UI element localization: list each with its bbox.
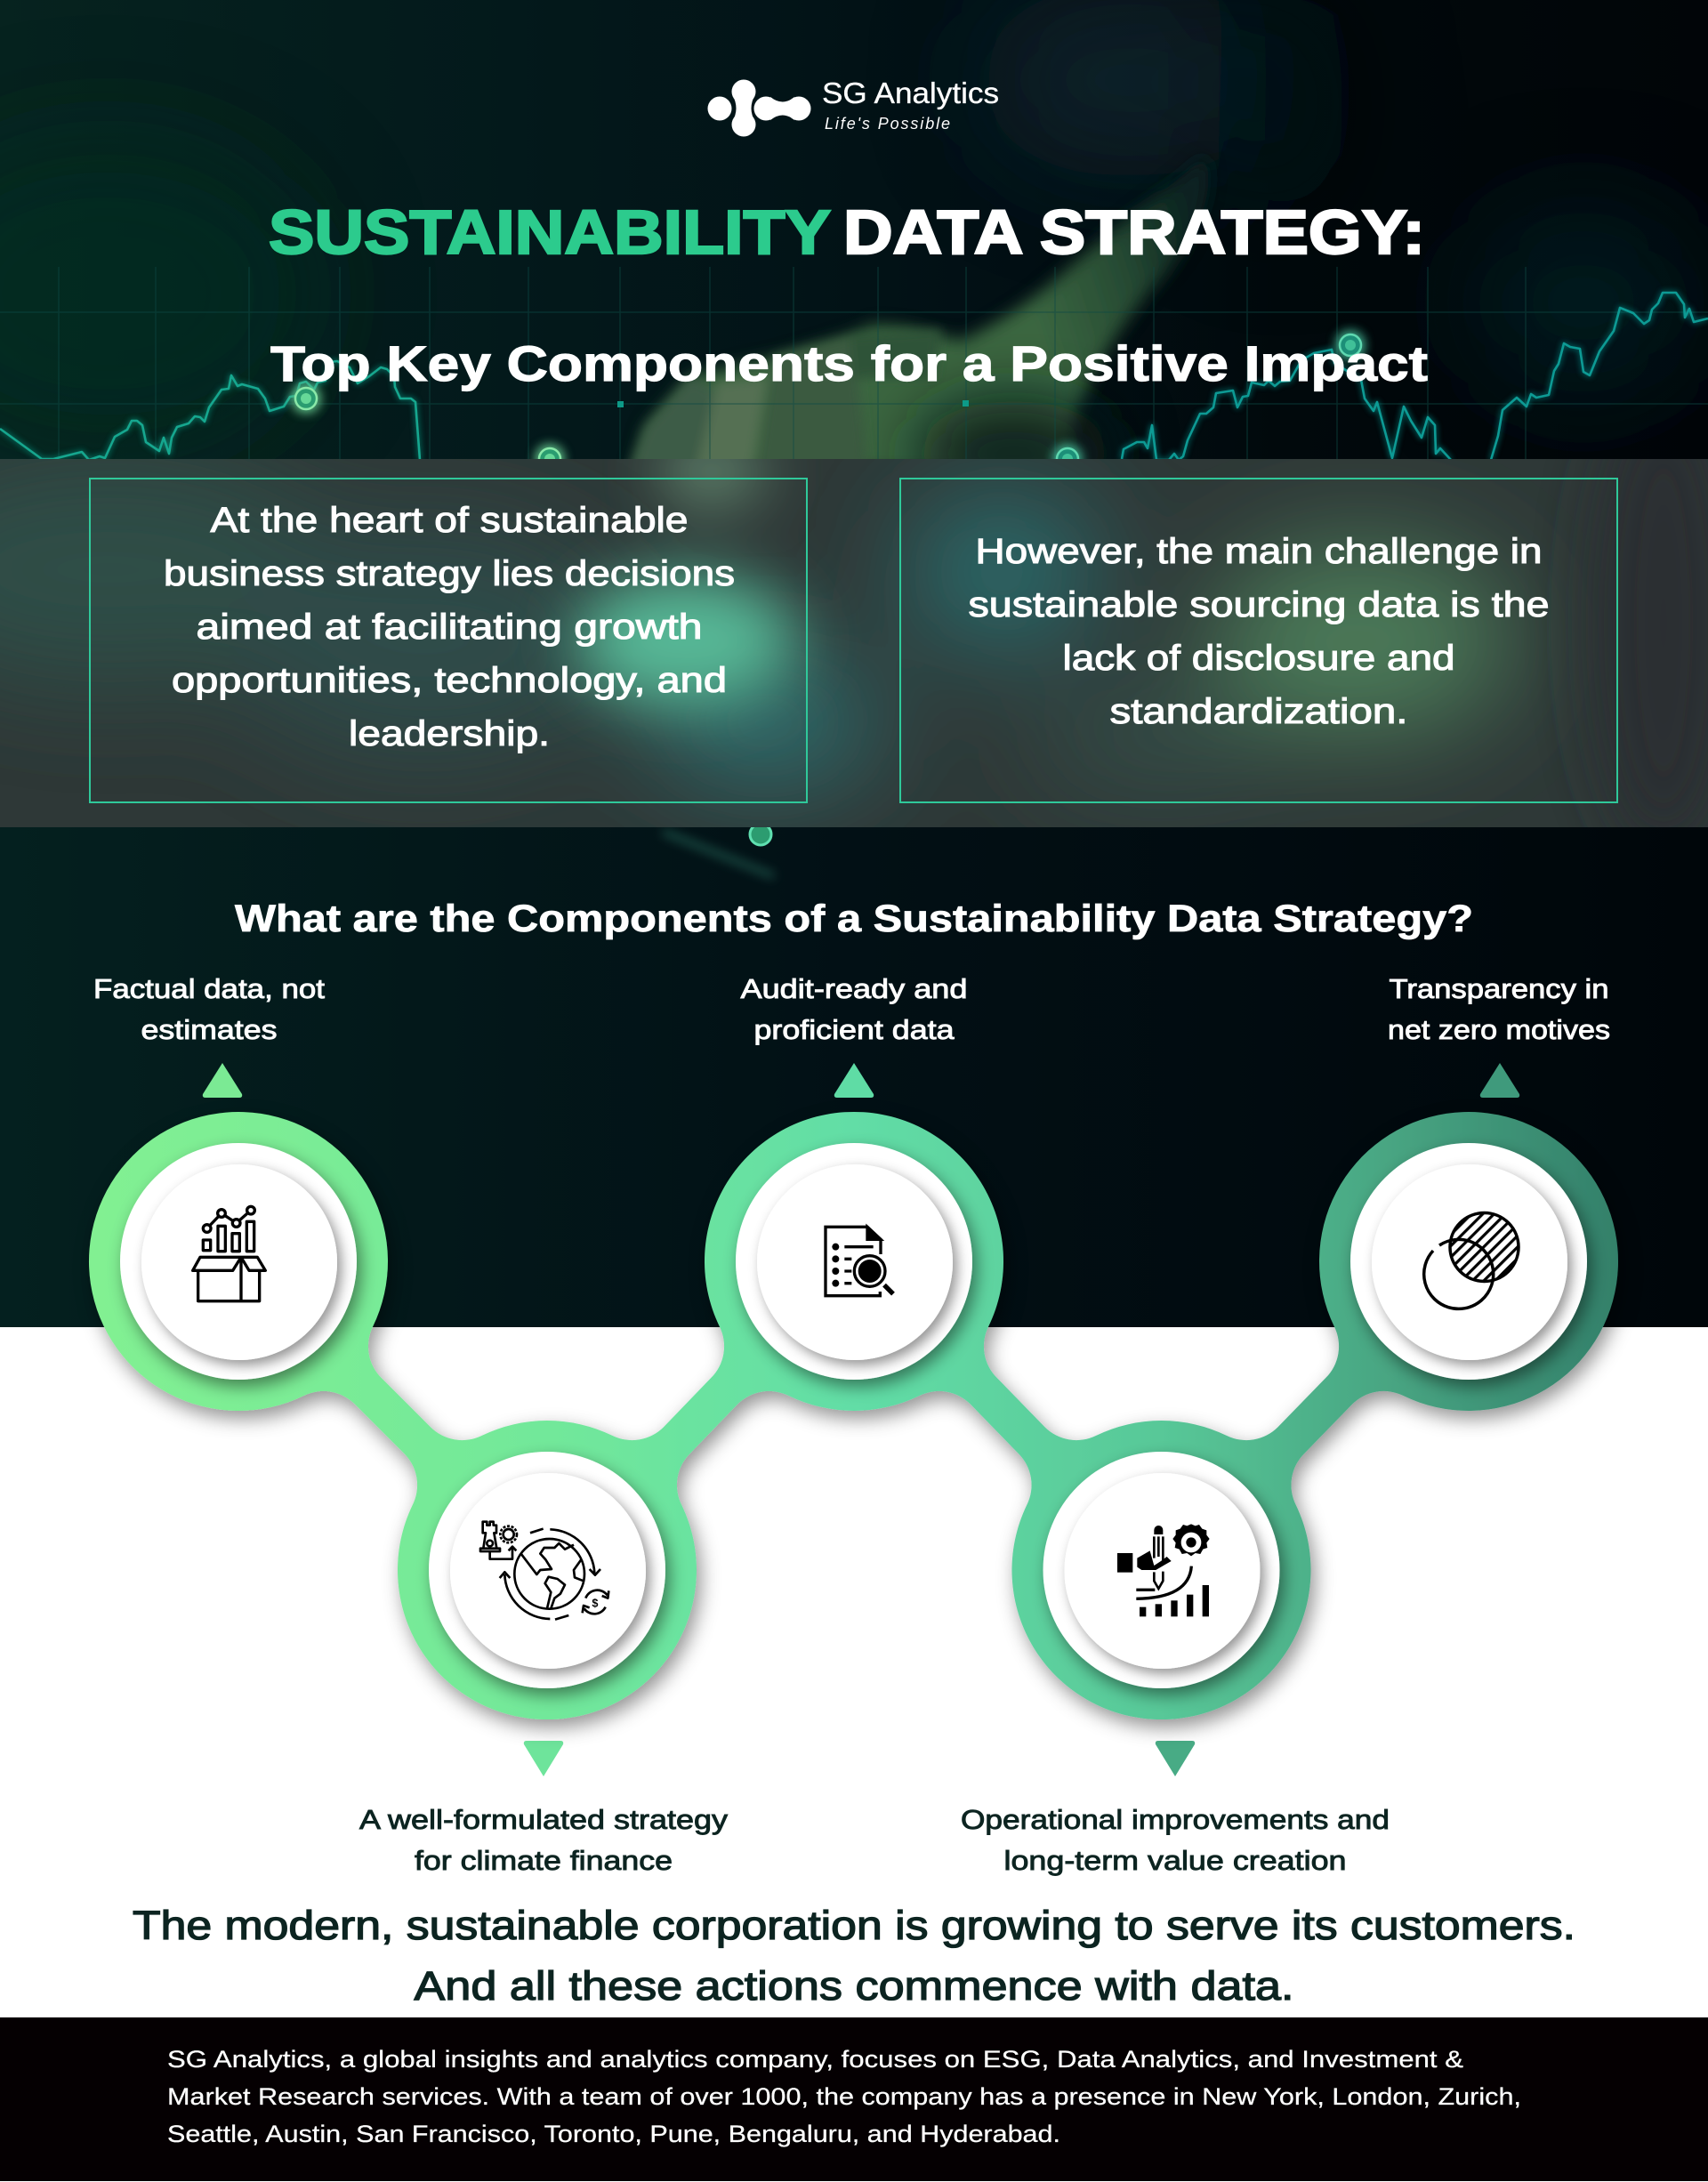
hand and arm	[625, 165, 1211, 459]
label: operational improvements: long-term value creation	[1003, 1845, 1347, 1876]
chart node	[1057, 448, 1078, 470]
text box: left intro: business strategy lies decisions	[164, 554, 735, 593]
arrow: down 1	[524, 1741, 563, 1776]
text box: right challenge: lack of disclosure and	[1062, 639, 1455, 678]
label: transparency	[1388, 973, 1610, 1045]
title: SUSTAINABILITY	[269, 197, 831, 267]
icon: overlapping circles	[1424, 1213, 1519, 1308]
node 1 discs	[120, 1143, 357, 1380]
closing statement	[133, 1903, 1575, 2009]
text box: right challenge: sustainable sourcing data is the	[968, 585, 1550, 624]
text box: left intro: leadership.	[349, 714, 550, 753]
arrow: up 1	[203, 1063, 242, 1098]
footer: Seattle, Austin, San Francisco, Toronto, Pune, Bengaluru, and Hyderabad.	[167, 2121, 1060, 2147]
section heading: What are the Components of a Sustainability Data Strategy?	[235, 898, 1473, 940]
chart node	[539, 448, 560, 470]
arrow: up 3	[1480, 1063, 1519, 1098]
footer: Market Research services. With a team of over 1000, the company has a presence in New York, London, Zurich,	[167, 2083, 1521, 2110]
title: DATA STRATEGY:	[843, 197, 1425, 267]
chart markers	[617, 400, 969, 407]
connected circles path	[89, 1112, 1618, 1719]
chart nodes	[295, 388, 317, 409]
label: climate finance: for climate finance	[415, 1845, 673, 1876]
title	[269, 197, 1425, 267]
text box: right challenge: standardization.	[1110, 692, 1407, 731]
label: audit-ready	[740, 973, 968, 1045]
arrow: up 2	[834, 1063, 874, 1098]
logo	[708, 76, 999, 137]
closing statement: And all these actions commence with data.	[415, 1963, 1293, 2009]
text box: left intro: At the heart of sustainable	[210, 501, 689, 540]
panel: frosted band	[0, 459, 1708, 827]
icon: globe finance	[480, 1522, 608, 1620]
chart node	[1340, 334, 1361, 356]
node 3 discs	[736, 1143, 972, 1380]
device glint	[663, 824, 774, 876]
label: climate finance	[359, 1804, 729, 1876]
label: factual data: estimates	[141, 1014, 278, 1045]
text box: left intro	[90, 479, 807, 802]
text box: left intro: opportunities, technology, and	[172, 661, 727, 700]
node 4 discs	[1043, 1452, 1279, 1688]
dark header background	[0, 0, 1708, 1327]
text box: right challenge: However, the main challenge in	[975, 532, 1543, 571]
footer: SG Analytics, a global insights and analytics company, focuses on ESG, Data Analytics, and Investment &	[167, 2046, 1463, 2073]
icon: audit document	[826, 1227, 893, 1296]
label: audit-ready: Audit-ready and	[740, 973, 968, 1004]
icon: data box	[193, 1206, 265, 1301]
node 5 discs	[1350, 1143, 1587, 1380]
logo: Life's Possible	[825, 115, 950, 133]
label: factual data: Factual data, not	[93, 973, 325, 1004]
footer	[0, 2017, 1708, 2181]
label: transparency: Transparency in	[1390, 973, 1608, 1004]
logo mark	[708, 80, 811, 137]
logo: SG Analytics	[822, 76, 999, 109]
closing statement: The modern, sustainable corporation is growing to serve its customers.	[133, 1903, 1575, 1948]
arrow: down 2	[1156, 1741, 1195, 1776]
glowing chart line	[0, 293, 1708, 470]
node 2 discs	[429, 1452, 665, 1688]
icon: operations	[1117, 1524, 1210, 1616]
chart grid lines	[0, 267, 1708, 459]
subtitle: Top Key Components for a Positive Impact	[270, 335, 1428, 391]
label: audit-ready: proficient data	[754, 1014, 955, 1045]
label: climate finance: A well-formulated strategy	[359, 1804, 729, 1835]
label: operational improvements	[961, 1804, 1390, 1876]
label: transparency: net zero motives	[1388, 1014, 1610, 1045]
text box: right challenge	[900, 479, 1617, 802]
label: factual data	[93, 973, 325, 1045]
icon: globe finance: $	[592, 1598, 598, 1610]
text box: left intro: aimed at facilitating growth	[196, 608, 703, 647]
label: operational improvements: Operational improvements and	[961, 1804, 1390, 1835]
